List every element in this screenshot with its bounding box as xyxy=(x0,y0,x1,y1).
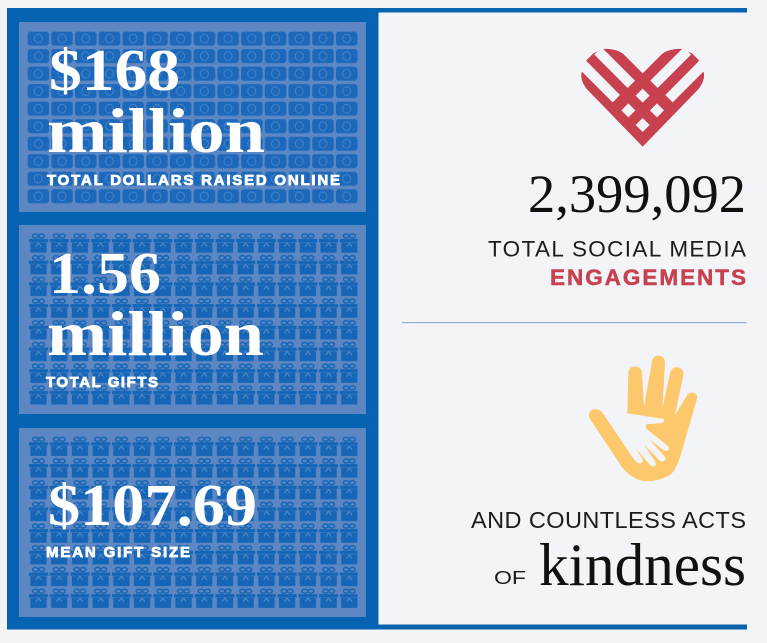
panel: mean gift size xyxy=(19,428,366,617)
figure: social media engagements count: 2,399,092 xyxy=(528,164,746,224)
figure: 1.56 million: million xyxy=(47,299,264,369)
label: total dollars raised online: TOTAL DOLLARS RAISED ONLINE xyxy=(47,172,340,189)
icon: adult and child hands xyxy=(589,356,697,481)
label: total gifts: TOTAL GIFTS xyxy=(46,374,158,391)
left blue frame xyxy=(7,8,378,630)
bottom rule xyxy=(7,624,747,630)
figure: $107.69: $107.69 xyxy=(48,472,257,538)
label: of: OF xyxy=(494,568,526,588)
divider xyxy=(402,322,746,323)
figure: $168 million: $168 xyxy=(49,37,180,103)
figure: $168 million: million xyxy=(47,96,265,166)
label: mean gift size: MEAN GIFT SIZE xyxy=(46,544,190,561)
label: kindness: kindness xyxy=(539,532,746,598)
top rule xyxy=(7,8,747,12)
label: total social media: TOTAL SOCIAL MEDIA xyxy=(488,236,746,262)
figure: 1.56 million: 1.56 xyxy=(49,240,161,306)
label: engagements: ENGAGEMENTS xyxy=(550,265,746,290)
figure: $168 million xyxy=(47,37,265,166)
panel: total gifts xyxy=(19,225,366,414)
label: and countless acts: AND COUNTLESS ACTS xyxy=(471,507,746,533)
panel: total dollars raised xyxy=(19,22,366,212)
figure: 1.56 million xyxy=(47,240,264,369)
icon: woven heart xyxy=(577,47,709,147)
